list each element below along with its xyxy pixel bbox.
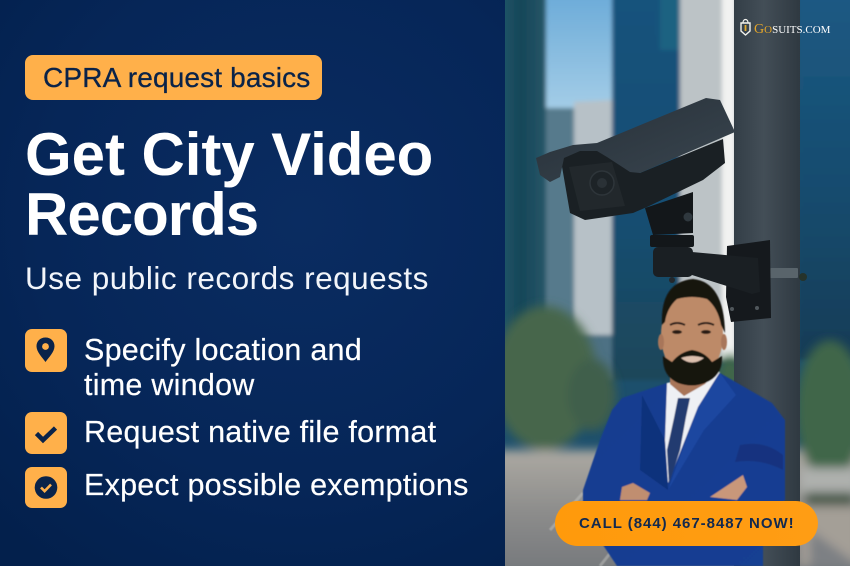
logo shield icon	[741, 20, 750, 35]
call to action button: CALL (844) 467-8487 NOW!	[579, 515, 795, 532]
camera hood	[536, 98, 735, 182]
blurred city background	[495, 0, 850, 566]
title	[25, 121, 433, 248]
attorney portrait	[583, 279, 785, 566]
text: specify location: time window	[84, 368, 255, 402]
head and beard	[658, 279, 727, 386]
subtitle: Use public records requests	[25, 260, 429, 296]
call to action button	[555, 501, 818, 546]
icon: security camera	[536, 98, 807, 322]
text: specify location: Specify location and	[84, 333, 362, 367]
camera body	[560, 139, 725, 220]
photo: street scene with camera and attorney	[505, 0, 850, 566]
neck	[670, 372, 716, 396]
necktie	[667, 398, 690, 484]
text: native file format: Request native file format	[84, 415, 436, 449]
crossed arms and hands	[620, 483, 650, 500]
blurred trees and road	[493, 306, 850, 566]
panel: navy text panel	[0, 0, 505, 566]
road markings	[550, 493, 615, 566]
camera wall mount	[645, 192, 807, 322]
jacket fold shadows	[640, 395, 668, 490]
badge: CPRA request basics	[25, 55, 322, 100]
street pole	[734, 0, 800, 566]
camera lens front	[569, 162, 625, 211]
text: possible exemptions: Expect possible exemptions	[84, 468, 469, 502]
title: Get City Video	[25, 121, 433, 188]
shirt	[665, 372, 720, 483]
logo: GoSuits.com	[741, 20, 831, 37]
icon: circled check	[25, 467, 67, 508]
logo wordmark: GOSUITS.COM	[754, 22, 831, 37]
suit jacket	[583, 373, 785, 566]
title: Records	[25, 181, 258, 248]
icon: check mark	[25, 412, 67, 454]
text: specify location	[84, 333, 362, 402]
badge: CPRA request basics: CPRA request basics	[43, 62, 310, 93]
icon: location pin	[25, 329, 67, 372]
